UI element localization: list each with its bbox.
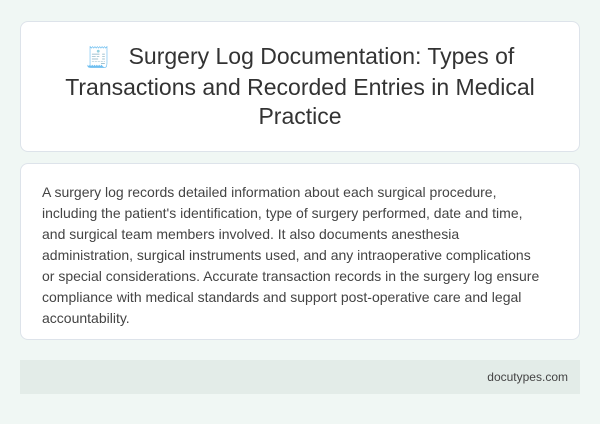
title: 🧾 Surgery Log Documentation: Types of Transactions and Recorded Entries in Medical Practice [65, 43, 535, 129]
footer: docutypes.com [487, 370, 568, 384]
description panel [20, 163, 580, 340]
title panel [20, 21, 580, 152]
description text: A surgery log records detailed information about each surgical procedure, including the patient's identification, type of surgery performed, date and time, and surgical team members involved. It also documents anesthesia administration, surgical instruments used, and any intraoperative complications or special considerations. Accurate transaction records in the surgery log ensure compliance with medical standards and support post-operative care and legal accountability. [42, 184, 539, 326]
footer [20, 360, 580, 394]
